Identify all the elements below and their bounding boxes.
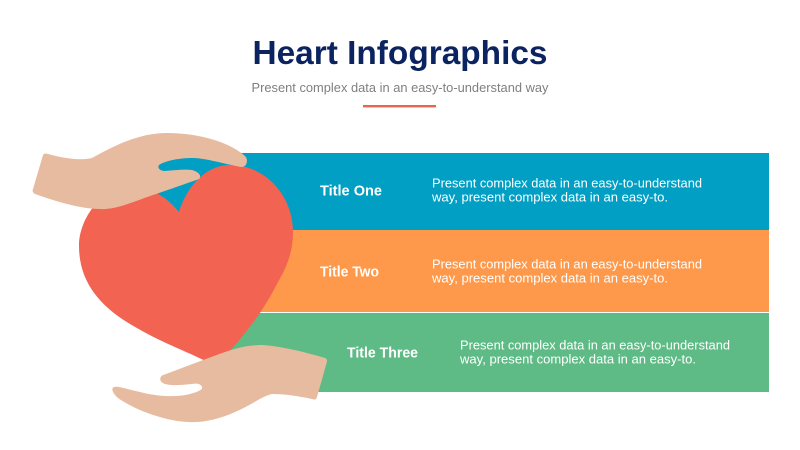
subtitle: Present complex data in an easy-to-understand way xyxy=(252,80,549,95)
icon: bottom hand xyxy=(112,345,327,422)
panel: title three band xyxy=(225,313,769,392)
title: Heart Infographics xyxy=(252,34,548,71)
text block: title one description: Present complex data in an easy-to-understand xyxy=(432,176,702,190)
text block: title three description: Present complex data in an easy-to-understand xyxy=(460,338,730,352)
text block: title three description: way, present complex data in an easy-to. xyxy=(459,352,696,366)
heading: title three: Title Three xyxy=(347,344,418,362)
icon: top hand xyxy=(33,133,247,209)
icon: heart xyxy=(79,165,293,366)
panel: title one band xyxy=(150,150,769,230)
title underline xyxy=(363,105,436,107)
heading: title one: Title One xyxy=(320,182,382,200)
panel: title two band xyxy=(235,230,769,312)
text block: title two description: way, present complex data in an easy-to. xyxy=(431,272,668,286)
text block: title one description: way, present complex data in an easy-to. xyxy=(431,190,668,204)
heading: title two: Title Two xyxy=(320,264,379,280)
text block: title two description: Present complex data in an easy-to-understand xyxy=(432,258,702,272)
